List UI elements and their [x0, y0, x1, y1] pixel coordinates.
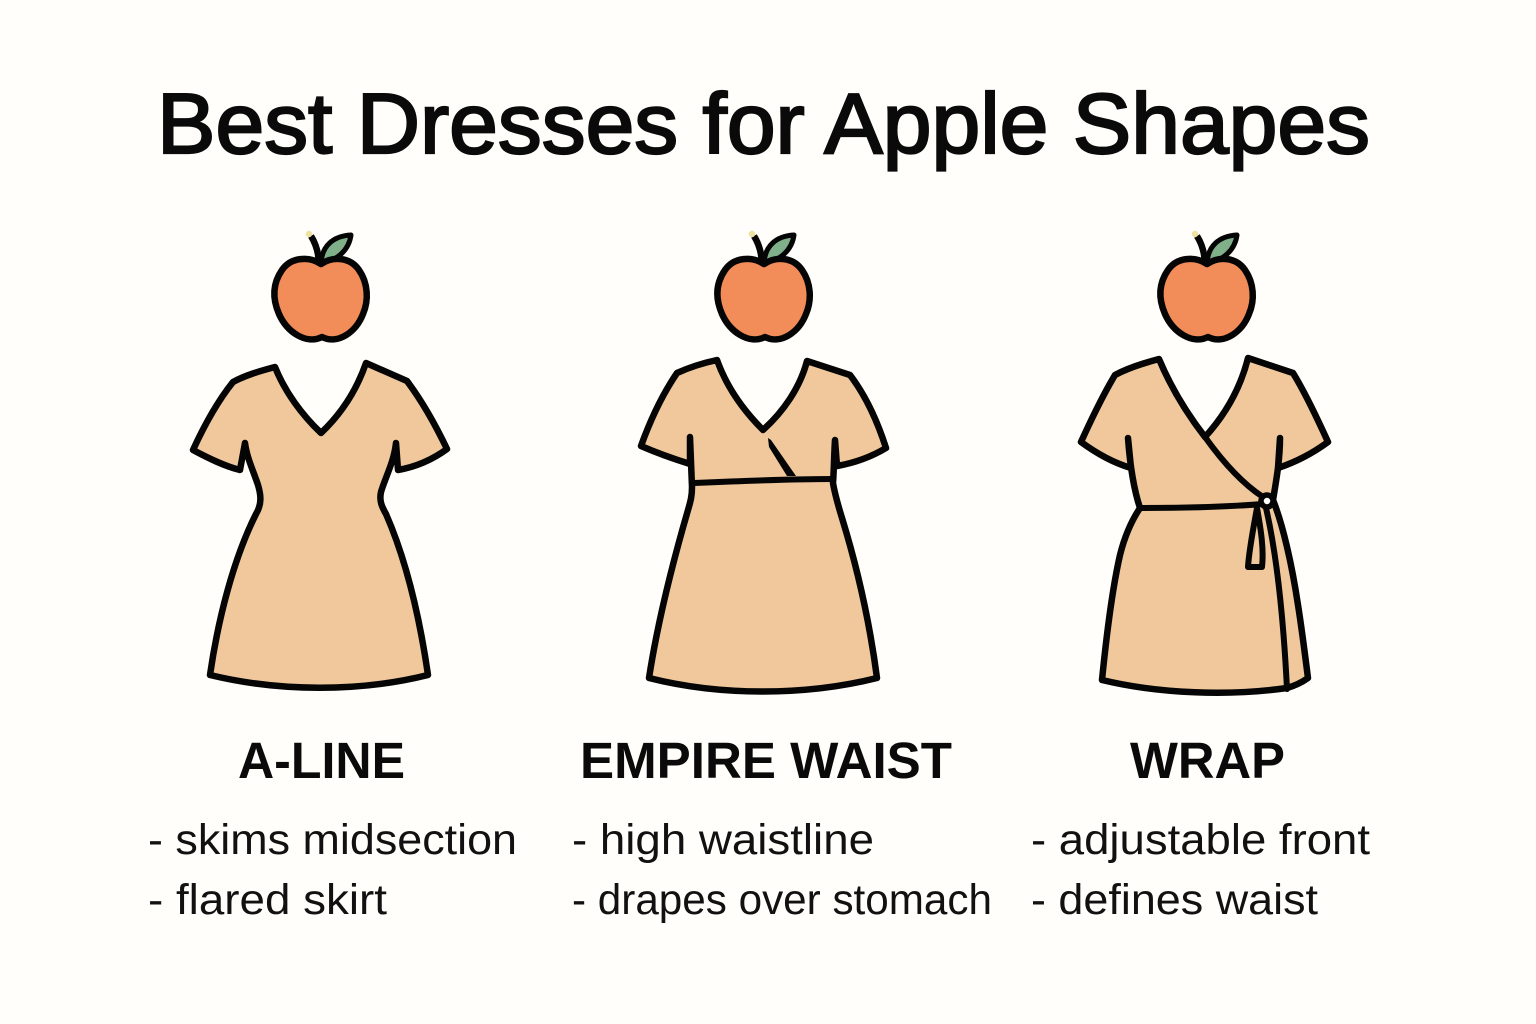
panel: Empire waist — [641, 231, 886, 692]
panel: Wrap — [1081, 231, 1328, 693]
illustration: A-line dress — [193, 363, 447, 688]
title: Best Dresses for Apple Shapes — [157, 77, 1370, 172]
wrap crossover — [1159, 359, 1263, 497]
inner panel edge — [1266, 508, 1287, 689]
text block: Empire waist benefits: - drapes over stomach — [572, 876, 992, 924]
belt ring — [1261, 495, 1273, 507]
wrap fold — [768, 438, 796, 476]
icon: apple A-line — [274, 231, 367, 339]
waist seam — [694, 479, 833, 483]
text block: Empire waist benefits: - high waistline — [572, 816, 874, 864]
text block: A-line benefits — [148, 816, 517, 924]
tie loop — [1248, 508, 1263, 567]
text block: A-line benefits: - flared skirt — [148, 876, 387, 924]
text block: Empire waist benefits — [572, 816, 992, 924]
heading: Wrap: WRAP — [1130, 732, 1285, 789]
illustration: empire waist dress — [641, 360, 886, 692]
heading: A-line: A-LINE — [238, 732, 405, 789]
text block: Wrap benefits — [1031, 816, 1370, 924]
text block: Wrap benefits: - adjustable front — [1031, 816, 1370, 864]
belt — [1140, 504, 1263, 508]
text block: Wrap benefits: - defines waist — [1031, 876, 1318, 924]
text block: A-line benefits: - skims midsection — [148, 816, 517, 864]
panel: A-line — [193, 231, 447, 688]
illustration: wrap dress — [1081, 358, 1328, 693]
icon: apple wrap — [1160, 231, 1253, 339]
icon: apple empire waist — [717, 231, 810, 339]
heading: Empire waist: EMPIRE WAIST — [580, 732, 952, 789]
